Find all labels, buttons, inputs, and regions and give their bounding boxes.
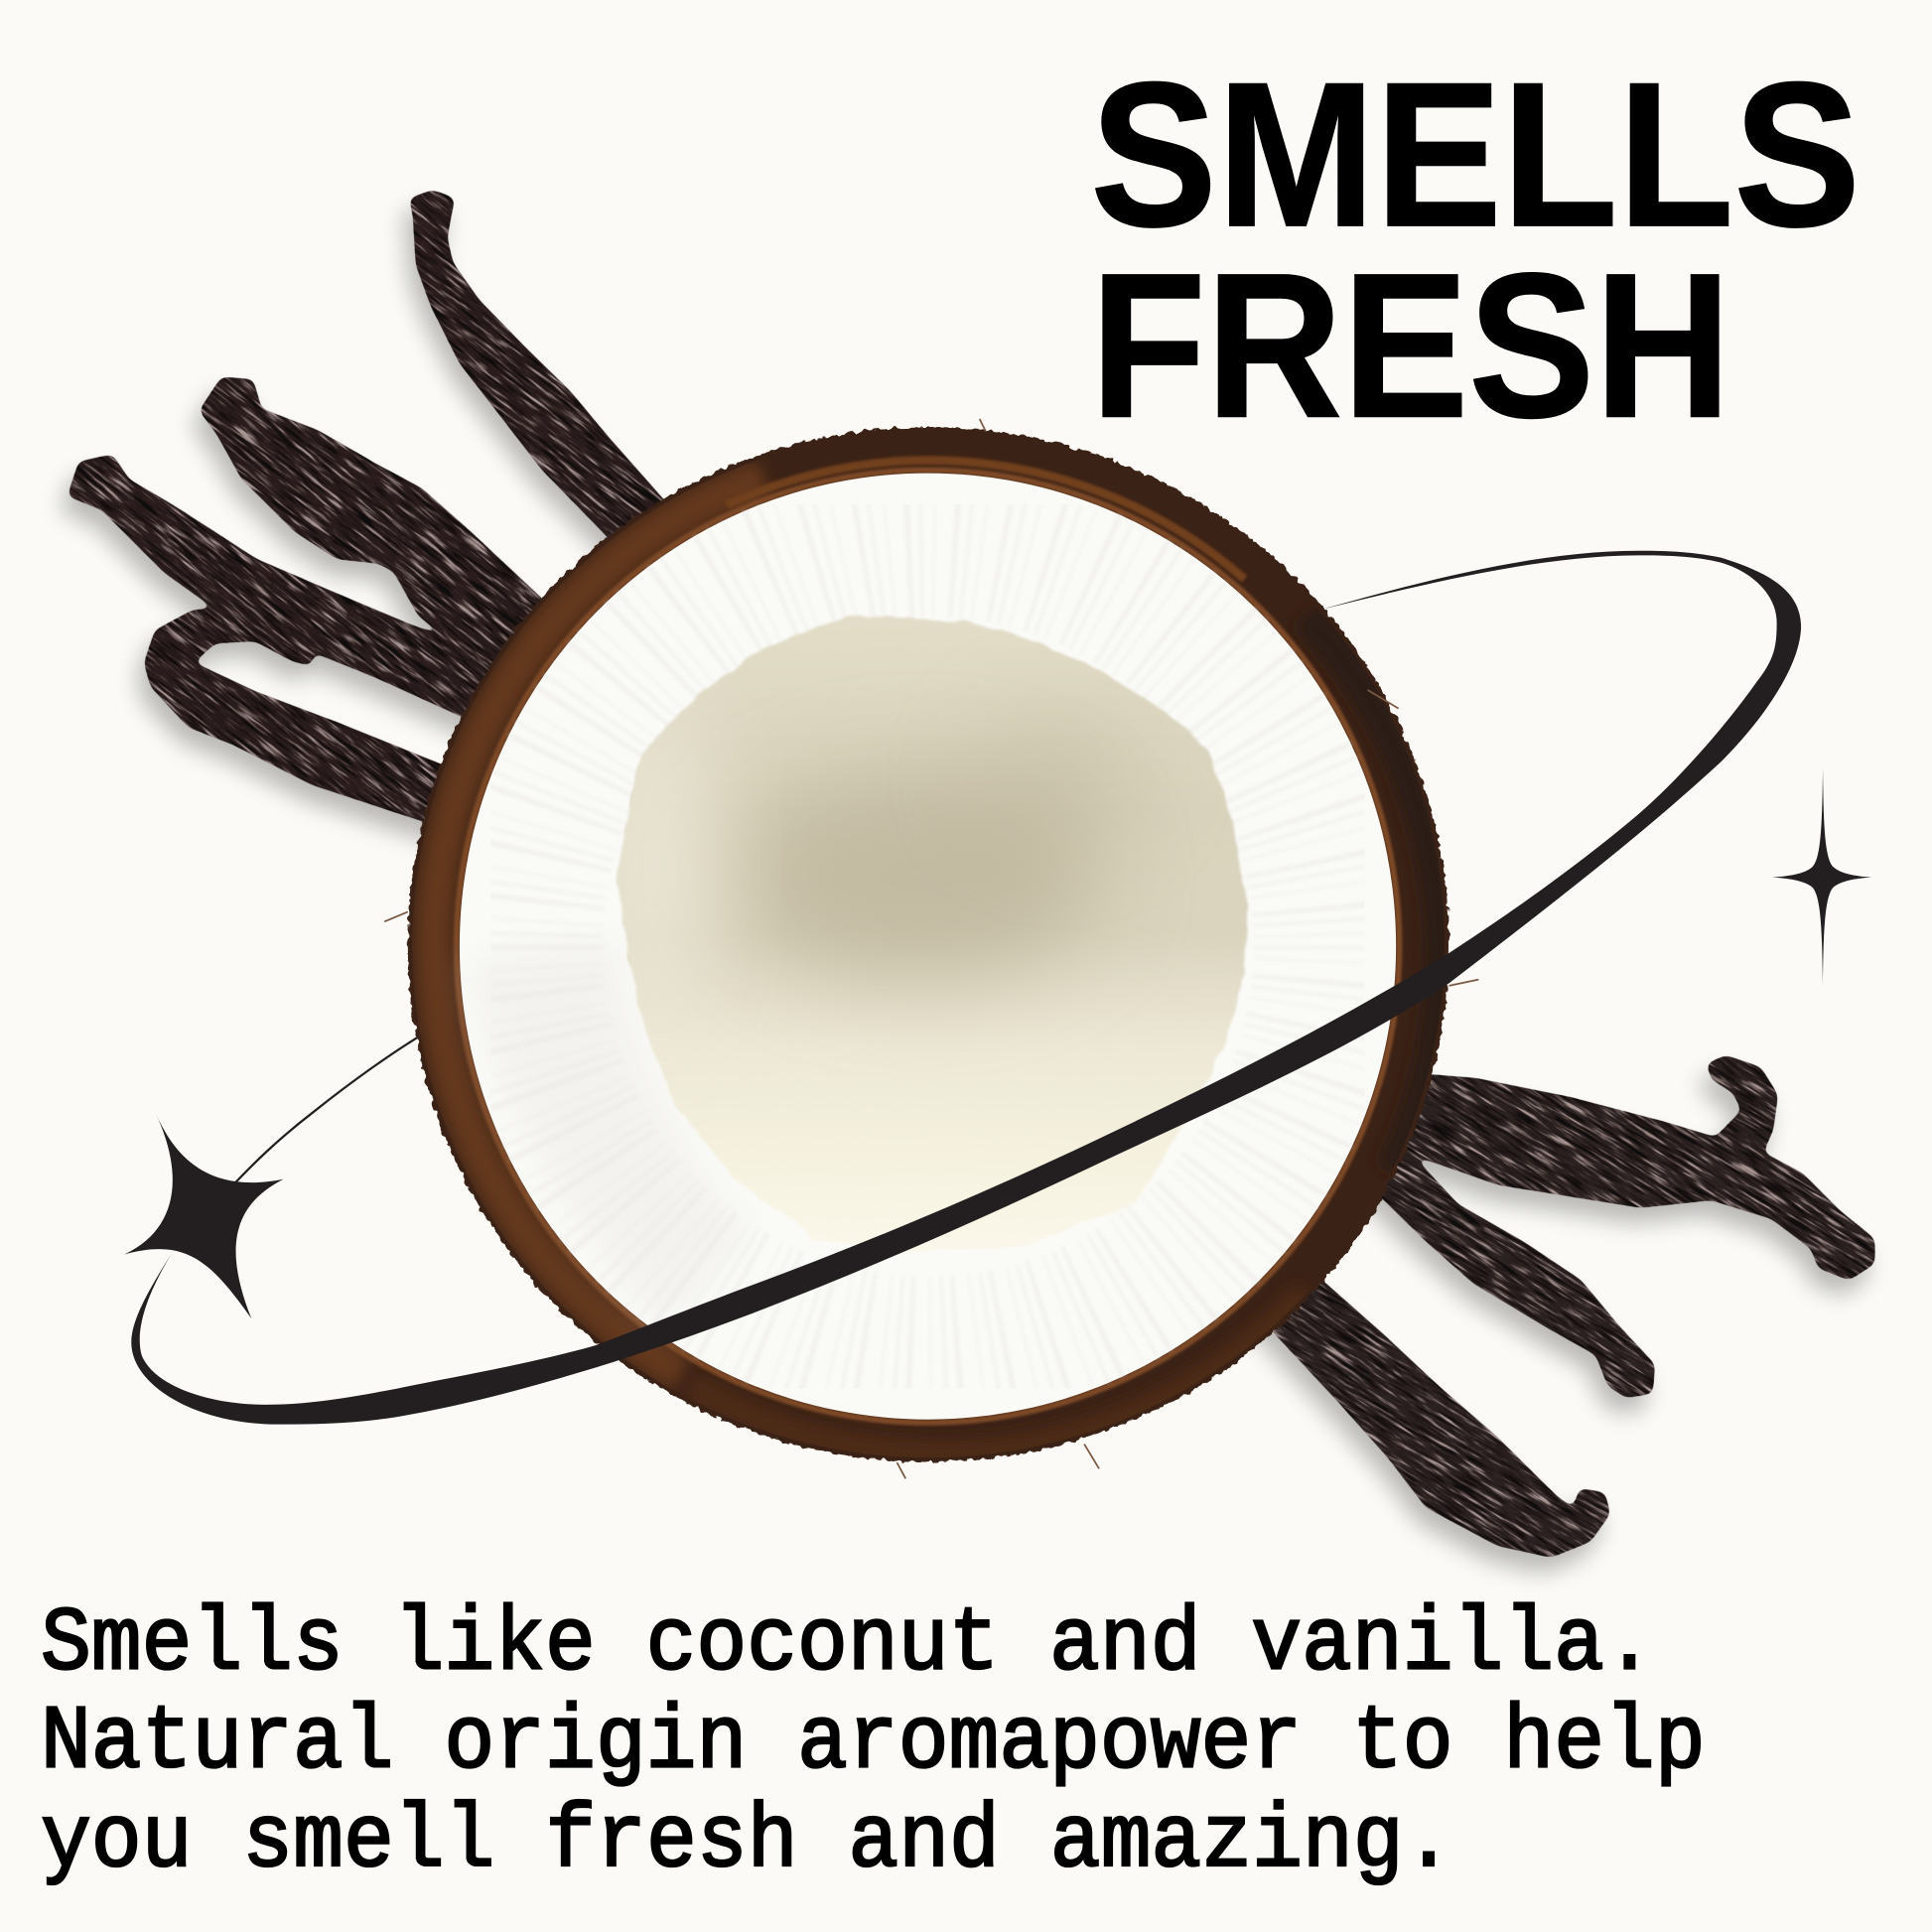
- icon: large four-point star: [124, 1115, 283, 1318]
- coconut shell colour variation: [434, 479, 1442, 1454]
- vanilla beans: upper left: [0, 0, 994, 1129]
- coconut: [384, 419, 1478, 1478]
- coconut top rim stripe: [727, 461, 1244, 579]
- body text: Smells like coconut and vanilla.: [41, 1594, 1655, 1696]
- title: FRESH: [1090, 229, 1731, 460]
- coconut flesh: [460, 474, 1396, 1420]
- body text: you smell fresh and amazing.: [41, 1792, 1453, 1893]
- icon: small four-point star: [1772, 767, 1871, 986]
- coconut shell: [408, 427, 1449, 1462]
- body text: Natural origin aromapower to help: [41, 1694, 1706, 1795]
- title: [1090, 39, 1861, 460]
- orbit: thin back segment: [231, 1032, 428, 1186]
- coconut cavity: [604, 616, 1248, 1253]
- body text: [41, 1594, 1706, 1893]
- title: SMELLS: [1090, 39, 1861, 269]
- coconut inner rim: [457, 470, 1399, 1423]
- coconut hairs: [384, 419, 1478, 1478]
- orbit ring: [131, 551, 1801, 1425]
- vanilla beans: lower right: [1020, 774, 1932, 1838]
